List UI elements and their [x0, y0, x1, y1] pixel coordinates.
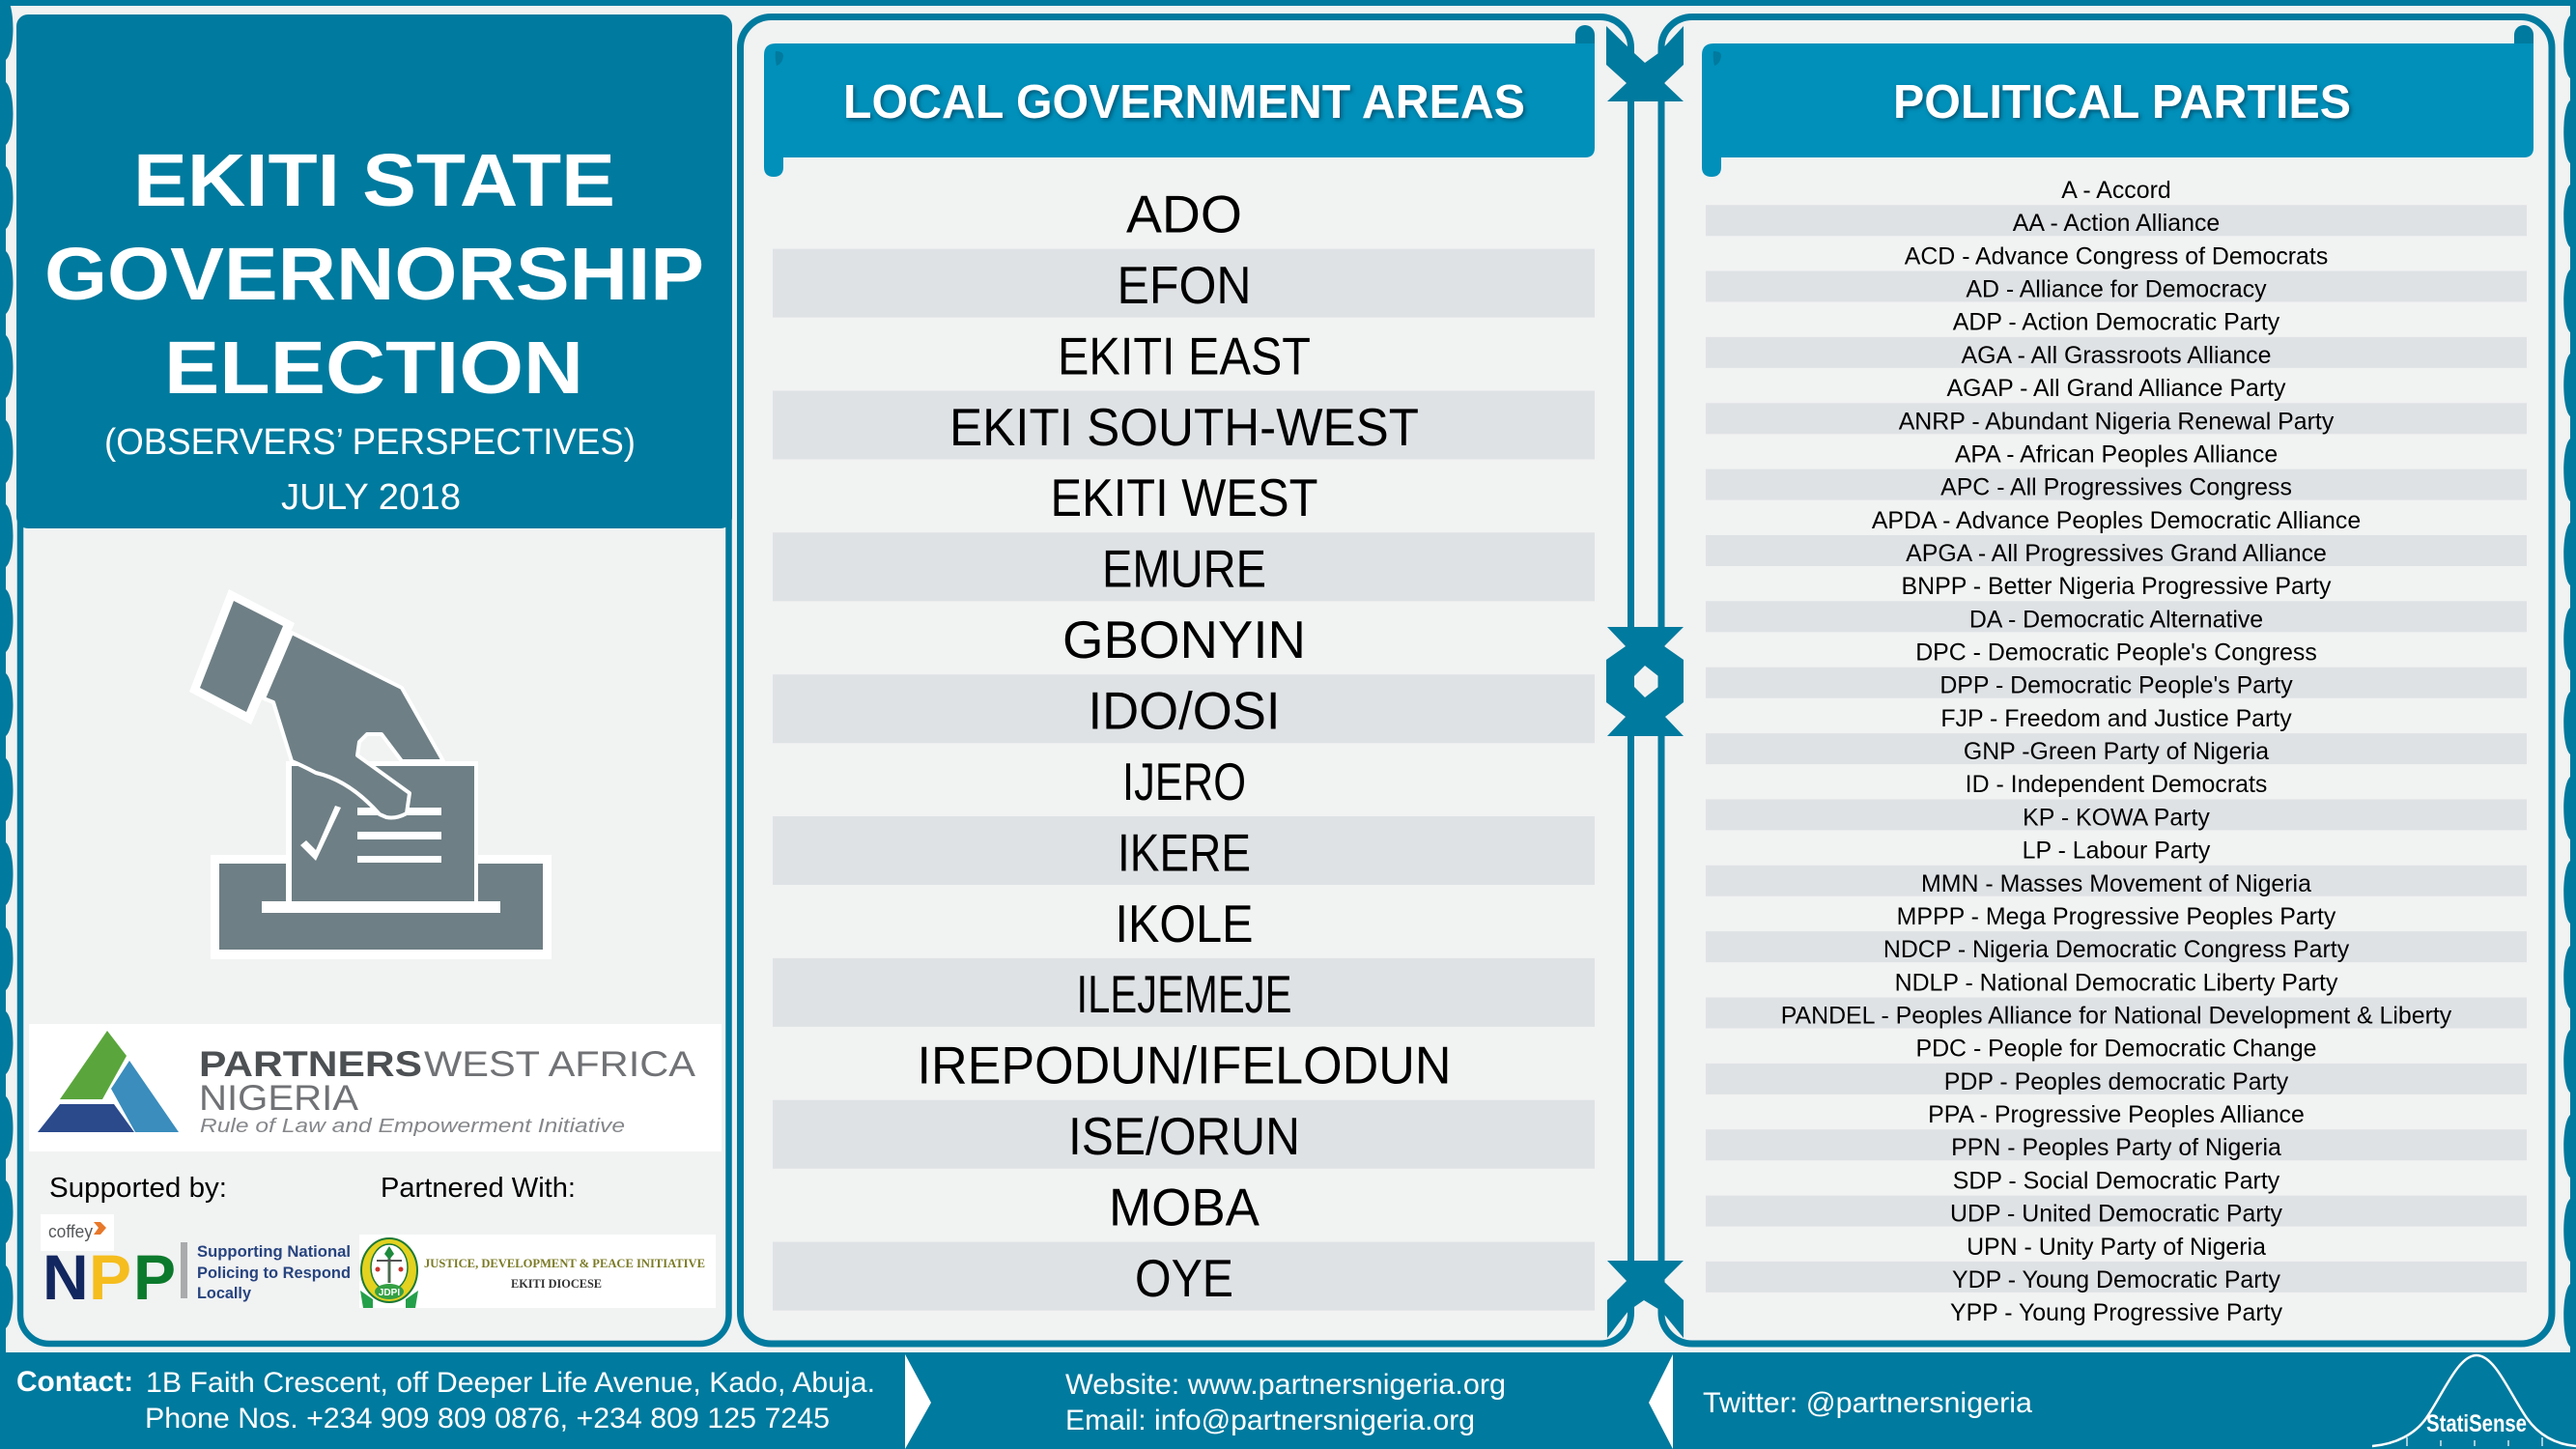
list: local government areas: EKITI WEST — [1051, 468, 1317, 527]
list: political parties: ANRP - Abundant Nigeria Renewal Party — [1899, 408, 2335, 435]
banner heading: LOCAL GOVERNMENT AREAS — [843, 76, 1525, 128]
panel: political parties frame — [1661, 17, 2552, 1344]
list: political parties — [1706, 177, 2527, 1326]
list: political parties: KP - KOWA Party — [2023, 804, 2210, 831]
banner: political parties — [1702, 25, 2534, 177]
list: political parties: APGA - All Progressives Grand Alliance — [1906, 540, 2327, 567]
list: political parties: LP - Labour Party — [2023, 838, 2211, 865]
logo: NPP: P — [133, 1241, 176, 1313]
logo: JDPI — [359, 1235, 716, 1308]
list: political parties: DA - Democratic Alternative — [1969, 606, 2263, 633]
label: supported by: Supported by: — [49, 1173, 227, 1204]
list: political parties: PDC - People for Democratic Change — [1915, 1036, 2317, 1063]
footer twitter: Twitter: @partnersnigeria — [1703, 1387, 2032, 1419]
list: political parties: PDP - Peoples democratic Party — [1944, 1068, 2289, 1095]
list: political parties: AGAP - All Grand Alliance Party — [1947, 375, 2286, 402]
list: political parties: NDLP - National Democratic Liberty Party — [1895, 969, 2338, 996]
label: partnered with: Partnered With: — [381, 1173, 576, 1204]
logo wordmark: Rule of Law and Empowerment Initiative — [200, 1116, 625, 1137]
list: political parties: YDP - Young Democratic Party — [1952, 1266, 2280, 1293]
logo: JDPI: JUSTICE, DEVELOPMENT & PEACE INITIATIVE — [424, 1256, 705, 1270]
banner: local government areas — [764, 25, 1595, 177]
list: local government areas — [773, 184, 1595, 1311]
footer contact: 1B Faith Crescent, off Deeper Life Avenue, Kado, Abuja. — [146, 1367, 875, 1399]
footer contact — [16, 1366, 875, 1435]
ornament: middle connector — [1606, 627, 1684, 736]
logo: coffey: coffey — [48, 1222, 93, 1241]
list: political parties: APA - African Peoples Alliance — [1955, 440, 2278, 468]
footer website and email — [1065, 1369, 1506, 1436]
list: local government areas: IKOLE — [1115, 894, 1254, 953]
logo: NPP: Locally — [197, 1284, 252, 1302]
list: political parties: ACD - Advance Congress of Democrats — [1905, 242, 2328, 270]
title block — [16, 14, 732, 528]
footer website and email: Email: info@partnersnigeria.org — [1065, 1405, 1475, 1436]
logo: NPP: Policing to Respond — [197, 1264, 351, 1282]
logo: Partners West Africa Nigeria — [29, 1024, 722, 1151]
footer website and email: Website: www.partnersnigeria.org — [1065, 1369, 1506, 1401]
list: local government areas: EFON — [1117, 255, 1252, 315]
title heading: ELECTION — [164, 327, 583, 410]
list: local government areas: EKITI EAST — [1058, 326, 1311, 385]
list: political parties: NDCP - Nigeria Democratic Congress Party — [1883, 936, 2350, 963]
list: local government areas: GBONYIN — [1062, 610, 1306, 669]
list: political parties: GNP -Green Party of Nigeria — [1964, 738, 2269, 765]
ornament: top connector — [1606, 26, 1684, 101]
list: political parties: ADP - Action Democratic Party — [1953, 309, 2280, 336]
logo wordmark: PARTNERS — [199, 1044, 422, 1084]
footer arrow right — [1649, 1354, 1673, 1449]
list: political parties: ID - Independent Democrats — [1966, 771, 2267, 798]
logo: coffey — [41, 1214, 114, 1251]
list: local government areas: IDO/OSI — [1088, 680, 1281, 740]
list: political parties: UDP - United Democratic Party — [1950, 1201, 2283, 1228]
list: political parties: SDP - Social Democratic Party — [1953, 1167, 2280, 1194]
logo: NPP: N — [42, 1241, 89, 1313]
panel: local government areas frame — [740, 17, 1630, 1344]
list: local government areas: EMURE — [1102, 539, 1266, 599]
list: political parties: A - Accord — [2061, 177, 2171, 204]
icon: hand casting ballot — [189, 589, 552, 959]
logo: NPP: Supporting National — [197, 1242, 351, 1261]
panel: left column frame — [20, 29, 728, 1344]
logo: NPP: P — [89, 1241, 131, 1313]
emblem — [360, 1238, 418, 1308]
list: local government areas: EKITI SOUTH-WEST — [949, 397, 1419, 457]
list: political parties: PANDEL - Peoples Alliance for National Development & Liberty — [1781, 1003, 2452, 1030]
list: local government areas: IKERE — [1118, 822, 1251, 882]
logo wordmark — [199, 1044, 695, 1137]
list: political parties: AA - Action Alliance — [2013, 210, 2220, 237]
list: political parties: UPN - Unity Party of Nigeria — [1967, 1234, 2266, 1261]
footer contact: Contact: — [16, 1366, 133, 1398]
list: local government areas: ISE/ORUN — [1068, 1106, 1300, 1166]
footer bar — [0, 1352, 2576, 1449]
logo: StatiSense — [2372, 1355, 2576, 1446]
list: political parties: AD - Alliance for Democracy — [1966, 276, 2267, 303]
title heading: EKITI STATE — [133, 139, 615, 222]
list: local government areas: IREPODUN/IFELODUN — [918, 1036, 1451, 1095]
list: political parties: BNPP - Better Nigeria Progressive Party — [1902, 573, 2332, 600]
logo wordmark: NIGERIA — [199, 1078, 358, 1118]
list: political parties: DPP - Democratic People's Party — [1939, 672, 2293, 699]
list: local government areas: IJERO — [1122, 752, 1246, 811]
footer arrow left — [905, 1354, 931, 1449]
list: political parties: APDA - Advance Peoples Democratic Alliance — [1872, 507, 2361, 534]
list: political parties: APC - All Progressives Congress — [1940, 474, 2292, 501]
logo wordmark: WEST AFRICA — [424, 1044, 695, 1084]
logo mark: triangle — [38, 1031, 179, 1132]
title heading — [44, 139, 704, 410]
logo: NPP — [42, 1241, 351, 1313]
subtitle — [104, 422, 636, 518]
subtitle: JULY 2018 — [281, 477, 461, 518]
list: local government areas: MOBA — [1109, 1177, 1260, 1236]
list: political parties: FJP - Freedom and Justice Party — [1940, 705, 2292, 732]
list: local government areas: ADO — [1126, 184, 1242, 243]
list: political parties: PPA - Progressive Peoples Alliance — [1928, 1101, 2305, 1128]
footer contact: Phone Nos. +234 909 809 0876, +234 809 125 7245 — [145, 1403, 830, 1435]
list: local government areas: OYE — [1135, 1248, 1233, 1308]
ornament: bottom connector — [1607, 1261, 1684, 1338]
list: political parties: AGA - All Grassroots Alliance — [1962, 342, 2271, 369]
logo: JDPI: EKITI DIOCESE — [511, 1276, 602, 1291]
list: local government areas: ILEJEMEJE — [1076, 964, 1292, 1024]
subtitle: (OBSERVERS’ PERSPECTIVES) — [104, 422, 636, 463]
banner heading: POLITICAL PARTIES — [1893, 76, 2351, 128]
title heading: GOVERNORSHIP — [44, 233, 704, 316]
list: political parties: MMN - Masses Movement of Nigeria — [1921, 870, 2311, 897]
list: political parties: PPN - Peoples Party of Nigeria — [1951, 1134, 2281, 1161]
list: political parties: YPP - Young Progressive Party — [1950, 1299, 2283, 1326]
emblem: JDPI — [379, 1288, 400, 1298]
list: political parties: MPPP - Mega Progressive Peoples Party — [1897, 903, 2336, 930]
logo: StatiSense: StatiSense — [2426, 1410, 2527, 1437]
list: political parties: DPC - Democratic People's Congress — [1915, 639, 2317, 667]
